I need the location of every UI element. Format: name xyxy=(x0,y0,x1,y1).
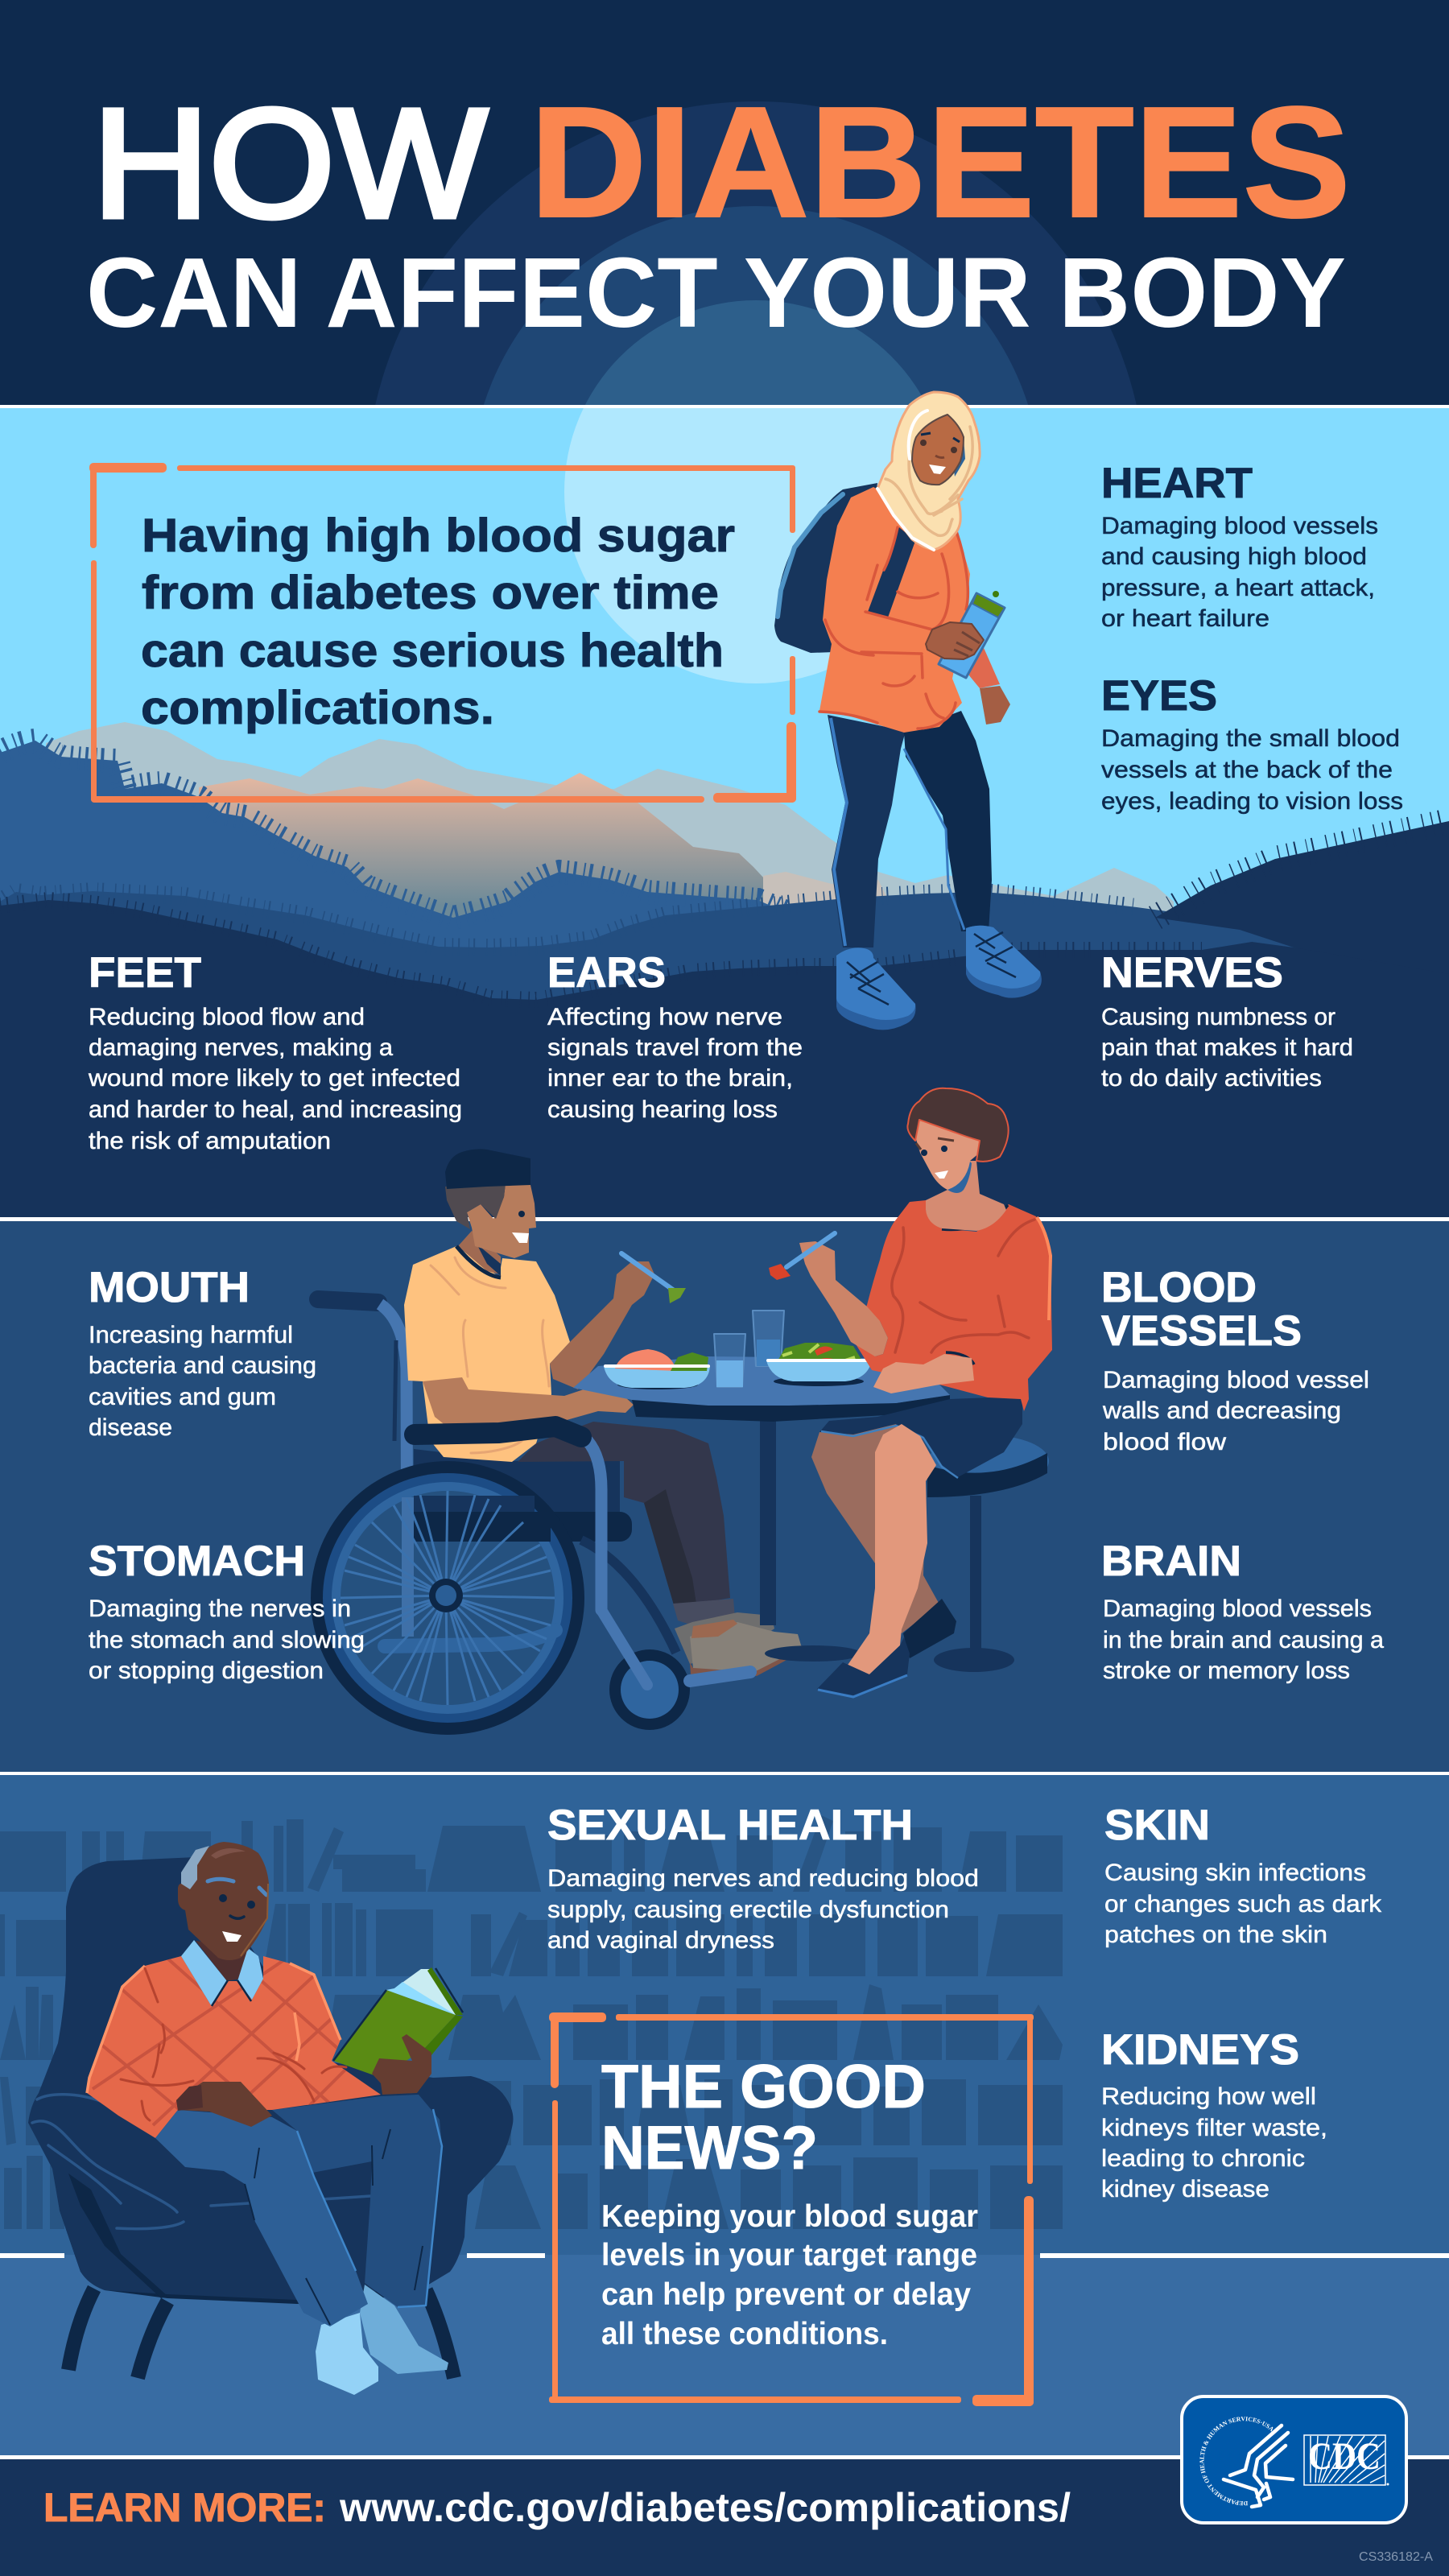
icon: HHS and CDC logo: CDC xyxy=(1308,2435,1381,2478)
panel: library section background xyxy=(0,1772,1449,2456)
text block: sexual health: supply, causing erectile dysfunction xyxy=(547,1897,949,1923)
divider: library floor xyxy=(0,2253,1449,2258)
text block: mouth: Increasing harmful xyxy=(89,1322,293,1348)
text block: stomach: the stomach and slowing xyxy=(89,1627,365,1653)
text block: brain: stroke or memory loss xyxy=(1103,1657,1350,1684)
good news frame xyxy=(549,2013,1034,2406)
good news text xyxy=(601,2053,978,2351)
text block: eyes: vessels at the back of the xyxy=(1101,757,1393,783)
text block: skin: Causing skin infections xyxy=(1104,1860,1366,1886)
text block: kidneys: kidneys filter waste, xyxy=(1101,2115,1327,2141)
text block: ears xyxy=(547,949,803,1123)
text block: kidneys: Reducing how well xyxy=(1101,2083,1316,2110)
good news text: can help prevent or delay xyxy=(601,2277,971,2312)
learn more link: LEARN MORE: xyxy=(43,2485,326,2530)
text block: skin: or changes such as dark xyxy=(1104,1891,1382,1918)
icon: HHS and CDC logo xyxy=(1180,2395,1408,2524)
text block: nerves xyxy=(1101,949,1353,1092)
text block: blood vessels xyxy=(1101,1264,1369,1455)
text block: eyes: EYES xyxy=(1101,672,1217,720)
learn more link: www.cdc.gov/diabetes/complications/ xyxy=(339,2485,1071,2530)
text block: blood vessels: BLOOD xyxy=(1101,1264,1257,1311)
illustration: man in wheelchair xyxy=(311,1149,802,1735)
title: CAN AFFECT YOUR BODY xyxy=(86,238,1346,349)
title: HOW xyxy=(93,76,487,250)
text block: skin: SKIN xyxy=(1104,1802,1210,1849)
text block: heart: HEART xyxy=(1101,460,1253,507)
text block: blood vessels: Damaging blood vessel xyxy=(1103,1367,1369,1393)
text block: sexual health: Damaging nerves and reducing blood xyxy=(547,1865,979,1892)
text block: ears: Affecting how nerve xyxy=(547,1004,782,1030)
illustration: woman at table with fork xyxy=(769,1088,1052,1697)
text block: feet: and harder to heal, and increasing xyxy=(89,1096,462,1123)
text block: sexual health: SEXUAL HEALTH xyxy=(547,1802,913,1849)
text block: brain: Damaging blood vessels xyxy=(1103,1596,1372,1622)
text block: kidneys xyxy=(1101,2026,1327,2202)
text block: stomach: Damaging the nerves in xyxy=(89,1596,351,1622)
good news text: Keeping your blood sugar xyxy=(601,2199,978,2234)
text block: blood vessels: VESSELS xyxy=(1101,1307,1302,1355)
callout frame: high blood sugar xyxy=(89,463,796,803)
statement text: from diabetes over time xyxy=(142,567,719,619)
publication code: CS336182-A xyxy=(1359,2550,1433,2564)
statement text: complications. xyxy=(141,682,494,734)
text block: nerves: NERVES xyxy=(1101,949,1283,997)
good news text: levels in your target range xyxy=(601,2238,977,2273)
text block: blood vessels: walls and decreasing xyxy=(1102,1397,1341,1424)
good news text: NEWS? xyxy=(601,2114,818,2182)
text block: kidneys: kidney disease xyxy=(1101,2176,1269,2202)
text block: feet: the risk of amputation xyxy=(89,1128,331,1154)
text block: feet: FEET xyxy=(89,949,201,997)
text block: heart: and causing high blood xyxy=(1101,543,1367,570)
text block: mouth: disease xyxy=(89,1414,172,1441)
text block: mouth: MOUTH xyxy=(89,1264,250,1311)
panel: footer xyxy=(0,2455,1449,2576)
text block: ears: signals travel from the xyxy=(547,1034,803,1061)
icon: HHS and CDC logo: DEPARTMENT OF HEALTH & HUMAN SERVICES·USA xyxy=(1199,2417,1274,2505)
text block: brain xyxy=(1101,1538,1384,1684)
text block: stomach: STOMACH xyxy=(89,1538,305,1585)
text block: mouth: cavities and gum xyxy=(89,1384,276,1410)
illustration: man reading in armchair xyxy=(28,1842,513,2395)
text block: mouth: bacteria and causing xyxy=(89,1352,316,1379)
text block: nerves: pain that makes it hard xyxy=(1101,1034,1353,1061)
text block: eyes: Damaging the small blood xyxy=(1101,725,1400,752)
text block: brain: in the brain and causing a xyxy=(1103,1627,1384,1653)
text block: kidneys: KIDNEYS xyxy=(1101,2026,1299,2074)
text block: ears: EARS xyxy=(547,949,666,997)
text block: brain: BRAIN xyxy=(1101,1538,1241,1585)
text block: feet: damaging nerves, making a xyxy=(89,1034,393,1061)
text block: nerves: to do daily activities xyxy=(1101,1065,1322,1092)
good news text: all these conditions. xyxy=(601,2317,888,2351)
text block: heart: pressure, a heart attack, xyxy=(1101,575,1375,601)
illustration: table with food xyxy=(573,1311,950,1662)
panel: sky background with sun xyxy=(0,405,1449,907)
text block: eyes xyxy=(1101,672,1403,815)
illustration: woman with hijab and backpack xyxy=(774,392,1042,1030)
text block: sexual health: and vaginal dryness xyxy=(547,1927,774,1954)
statement text: can cause serious health xyxy=(141,625,724,677)
text block: feet xyxy=(88,949,462,1154)
text block: skin: patches on the skin xyxy=(1104,1922,1327,1948)
text block: heart: Damaging blood vessels xyxy=(1101,513,1378,539)
text block: heart: or heart failure xyxy=(1101,605,1269,632)
text block: skin xyxy=(1104,1802,1382,1948)
text block: nerves: Causing numbness or xyxy=(1101,1004,1335,1030)
statement text: Having high blood sugar xyxy=(142,510,735,562)
title: DIABETES xyxy=(530,74,1351,250)
text block: sexual health xyxy=(547,1802,979,1954)
text block: ears: causing hearing loss xyxy=(547,1096,778,1123)
text block: mouth xyxy=(89,1264,316,1441)
text block: ears: inner ear to the brain, xyxy=(547,1065,793,1092)
text block: feet: wound more likely to get infected xyxy=(88,1065,460,1092)
text block: eyes: eyes, leading to vision loss xyxy=(1101,788,1403,815)
text block: feet: Reducing blood flow and xyxy=(89,1004,365,1030)
good news text: THE GOOD xyxy=(601,2053,926,2121)
text block: heart xyxy=(1101,460,1378,632)
section divider lines xyxy=(0,1217,1449,1221)
bookshelf silhouette xyxy=(0,1815,1063,2229)
text block: kidneys: leading to chronic xyxy=(1101,2145,1305,2172)
text block: blood vessels: blood flow xyxy=(1103,1429,1226,1455)
text block: stomach xyxy=(89,1538,365,1684)
panel: header background xyxy=(375,101,1137,405)
landscape: mountains and hills xyxy=(0,722,1449,1217)
statement text xyxy=(141,510,735,734)
panel: table section background xyxy=(0,1221,1449,1772)
title xyxy=(86,74,1351,349)
text block: stomach: or stopping digestion xyxy=(89,1657,324,1684)
